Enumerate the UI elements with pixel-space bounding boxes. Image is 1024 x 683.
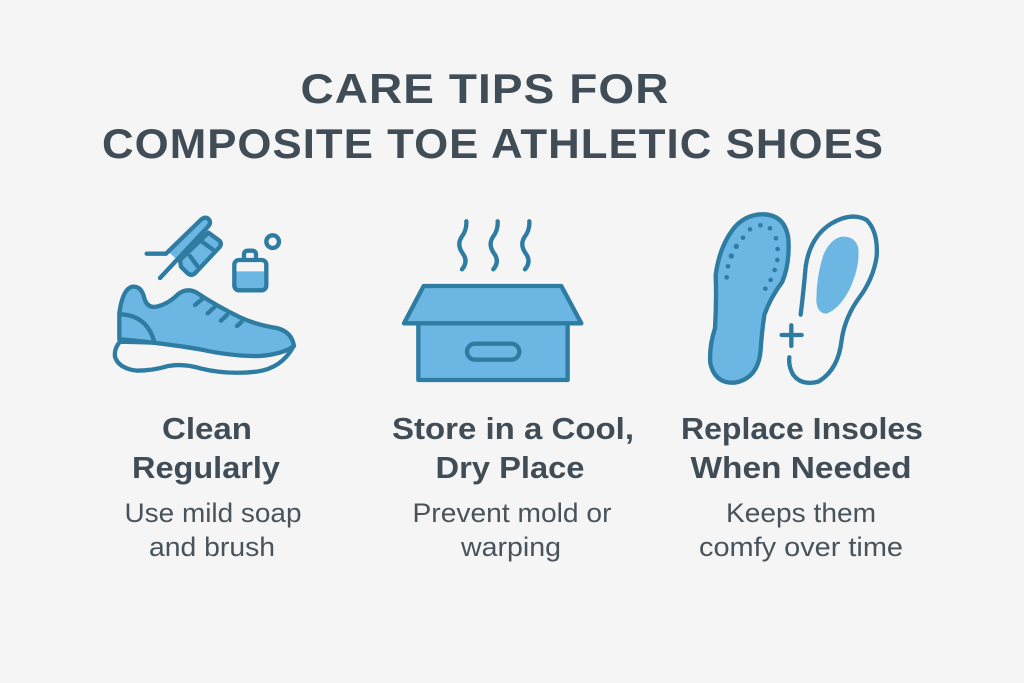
- icon: box lid: [404, 286, 581, 323]
- icon: box with vapour: [404, 221, 581, 380]
- heading: store: Store in a Cool,: [392, 411, 634, 446]
- icon: insoles: [710, 214, 877, 383]
- text: insoles description: [699, 498, 903, 562]
- text: store description: Prevent mold or: [412, 498, 612, 528]
- icon: shoe with brush and soap: [115, 217, 294, 373]
- icon: box body: [418, 323, 568, 380]
- heading: clean regularly: [132, 411, 281, 485]
- heading: store: [392, 411, 634, 485]
- text: clean description: and brush: [149, 532, 275, 562]
- heading: clean regularly: Clean: [162, 411, 252, 446]
- icon: right insole: [789, 217, 877, 383]
- icon: soap bottle: [234, 235, 279, 290]
- text: store description: warping: [460, 532, 561, 562]
- icon: heel pad: [816, 237, 859, 314]
- icon: plus sign: [782, 325, 802, 346]
- icon: brush: [147, 217, 221, 278]
- title: [102, 65, 884, 167]
- heading: clean regularly: Regularly: [132, 450, 281, 485]
- icon: shoe details: [120, 299, 242, 342]
- text: clean description: [124, 498, 302, 562]
- heading: store: Dry Place: [436, 450, 584, 485]
- icon: stitching dots: [724, 223, 780, 291]
- icon: shoe upper: [119, 287, 294, 356]
- panel: store in a cool, dry place: [392, 221, 634, 562]
- heading: replace insoles: [681, 411, 923, 485]
- icon: box handle: [467, 344, 519, 360]
- title: COMPOSITE TOE ATHLETIC SHOES: [102, 120, 884, 167]
- heading: replace insoles: Replace Insoles: [681, 411, 923, 446]
- text: insoles description: Keeps them: [726, 498, 876, 528]
- icon: shoe sole: [115, 342, 293, 373]
- title: CARE TIPS FOR: [300, 65, 670, 112]
- text: clean description: Use mild soap: [124, 498, 302, 528]
- panel: clean regularly: [115, 217, 302, 562]
- panel: replace insoles: [681, 214, 923, 562]
- icon: left insole: [710, 214, 789, 383]
- icon: vapour lines: [459, 221, 529, 269]
- heading: replace insoles: When Needed: [690, 450, 912, 485]
- text: store description: [412, 498, 612, 562]
- text: insoles description: comfy over time: [699, 532, 903, 562]
